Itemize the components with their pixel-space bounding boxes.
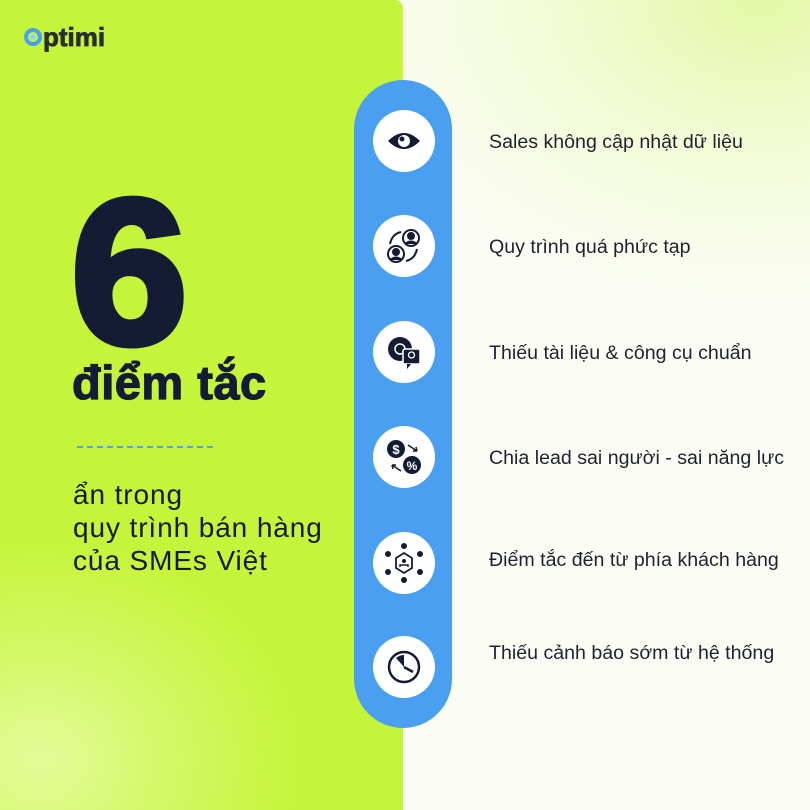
icon: money percent: $ [392,442,400,457]
icon: money percent [373,426,435,488]
label 6: Thiếu cảnh báo sớm từ hệ thống [489,642,774,664]
left green panel [0,0,403,810]
label 3: Thiếu tài liệu & công cụ chuẩn [489,342,752,364]
subtitle [73,479,323,576]
icon: network hexagon [373,532,435,594]
icon: clock [373,636,435,698]
subtitle: của SMEs Việt [73,545,268,576]
label 4: Chia lead sai người - sai năng lực [489,447,784,469]
heading: điểm tắc: điểm tắc [72,356,267,409]
big number 6: 6 [71,157,188,387]
blue pill timeline [354,80,452,728]
dashed divider [77,446,213,448]
icon: ideas chat [373,321,435,383]
subtitle: ẩn trong [73,479,183,510]
icon: money percent: % [407,459,418,473]
icon: people exchange [373,215,435,277]
label 1: Sales không cập nhật dữ liệu [489,131,743,153]
icon: eye [373,110,435,172]
logo: ptimi [43,22,105,52]
label 5: Điểm tắc đến từ phía khách hàng [489,549,779,571]
label 2: Quy trình quá phức tạp [489,236,691,258]
subtitle: quy trình bán hàng [73,512,323,543]
